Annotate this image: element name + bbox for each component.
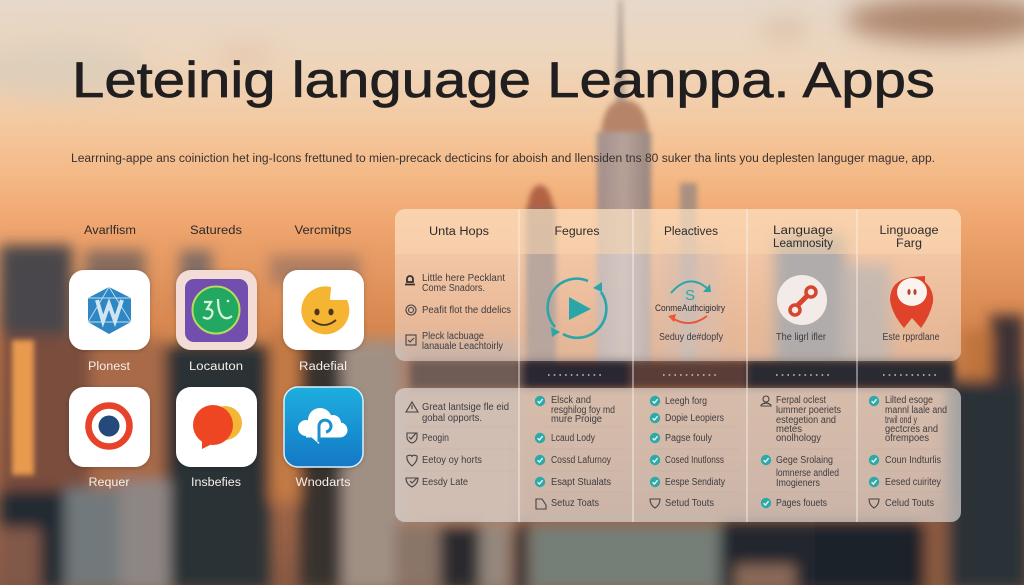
icon: sync cycle (655, 281, 725, 343)
column 5 list: mannl laale and (885, 405, 947, 416)
column headings: Farg (896, 238, 922, 250)
column 2 list: Lcaud Lody (551, 433, 595, 444)
column 4 list: Gege Srolaing (776, 455, 833, 466)
icon: sync cycle: Seduy de#dopfy (659, 332, 723, 343)
title: Leteinig language Leanppa. Apps (72, 52, 935, 108)
column headings: Unta Hops (429, 226, 489, 238)
column 3 list: Cosed Inutlonss (665, 455, 724, 466)
column 3 list: Pagse fouly (665, 433, 712, 444)
column 4 list (761, 395, 841, 509)
column 3 list: Leegh forg (665, 396, 707, 407)
panel: bottom comparison table (395, 388, 961, 522)
column 5 list: Coun Indturlis (885, 455, 941, 466)
column 4 list: metes (776, 424, 802, 435)
app icon: speech bubble (176, 387, 257, 467)
column 1 list: gobal opports. (422, 413, 482, 424)
feature list: lanauale Leachtoirly (422, 341, 503, 352)
column headings: Language (773, 225, 833, 237)
app names row two: Wnodarts (296, 477, 351, 489)
intro paragraph: Learrning-appe ans coiniction het ing-Icons frettuned to mien-precack decticins for aboish and llensiden tns 80 suker tha lints you deplesten languger mague, app. (71, 153, 935, 165)
column 4 list: estegetion and (776, 415, 836, 426)
row separators (405, 427, 950, 492)
app icon: green circle on purple (176, 270, 257, 350)
app category headings (84, 225, 352, 237)
column 4 list: Ferpal oclest (776, 395, 826, 406)
icon: link in circle (776, 275, 827, 343)
app names row one: Plonest (88, 361, 131, 373)
orange lit building strip (12, 340, 34, 475)
app icon: yellow smiley (283, 270, 364, 350)
column 5 list: trwil ond y (885, 415, 917, 426)
feature list: Peafit flot the ddelics (422, 305, 511, 316)
icon: sync cycle: S (685, 287, 695, 304)
column 4 list: lomnerse andled (776, 468, 839, 479)
column 5 list: gectcres and (885, 424, 938, 435)
column 2 list (535, 395, 615, 509)
column 1 list: Great lantsige fle eid (422, 402, 509, 413)
column 3 list: Eespe Sendiaty (665, 477, 725, 488)
column headings (429, 225, 938, 250)
app icon: red target (69, 387, 150, 467)
app names row two: Insbefies (191, 477, 241, 489)
column 4 list: onolhology (776, 433, 821, 444)
column 3 list: Setud Touts (665, 498, 714, 509)
app category headings: Avarlfism (84, 225, 136, 237)
app names row two (88, 477, 351, 489)
column 2 list: Esapt Stualats (551, 477, 611, 488)
column 4 list: Pages fouets (776, 498, 827, 509)
column headings: Pleactives (664, 226, 718, 238)
icon: sync cycle: ConmeAuthcigiolry (655, 303, 725, 314)
column headings: Linguoage (880, 225, 938, 237)
icon: play button with arrows (548, 279, 606, 338)
icon: red mascot pin: Este rpprdlane (882, 332, 940, 343)
column 1 list: Eetoy oy horts (422, 455, 482, 466)
column headings: Leamnosity (773, 238, 833, 250)
app names row one: Radefial (299, 361, 347, 373)
column 1 list: Eesdy Late (422, 477, 469, 488)
column 2 list: Cossd Lafurnoy (551, 455, 611, 466)
column 2 list: Elsck and (551, 395, 591, 406)
panel: top comparison table (395, 209, 961, 361)
app icon: blue cloud (284, 387, 363, 467)
column 5 list: Eesed cuiritey (885, 477, 941, 488)
column 1 list (406, 402, 509, 488)
column headings: Fegures (554, 226, 600, 238)
column 1 list: Peogin (422, 433, 449, 444)
feature list: Little here Pecklant (422, 273, 505, 284)
column 2 list: Setuz Toats (551, 498, 599, 509)
app names row one: Locauton (189, 361, 243, 373)
app icon: blue hexagon (69, 270, 150, 350)
column 2 list: resghilog foy md (551, 405, 615, 416)
app category headings: Satureds (190, 225, 242, 237)
column 2 list: mure Proige (551, 414, 603, 425)
column 5 list (869, 395, 947, 509)
app names row one (88, 361, 347, 373)
icon: red mascot pin (882, 276, 940, 343)
icon: link in circle: The ligrl ifler (776, 332, 827, 343)
column 4 list: lummer poeriets (776, 405, 841, 416)
feature list: Pleck lacbuage (422, 331, 485, 342)
column 5 list: ofrempoes (885, 433, 929, 444)
feature list: Come Snadors. (422, 283, 485, 294)
app category headings: Vercmitps (294, 225, 352, 237)
column 4 list: Imogieners (776, 478, 820, 489)
column 5 list: Celud Touts (885, 498, 934, 509)
column 5 list: Lilted esoge (885, 395, 933, 406)
connector dots between panels (548, 374, 937, 376)
feature list (405, 273, 511, 352)
app names row two: Requer (88, 477, 130, 489)
column 3 list: Dopie Leopiers (665, 413, 724, 424)
column 3 list (650, 396, 725, 509)
